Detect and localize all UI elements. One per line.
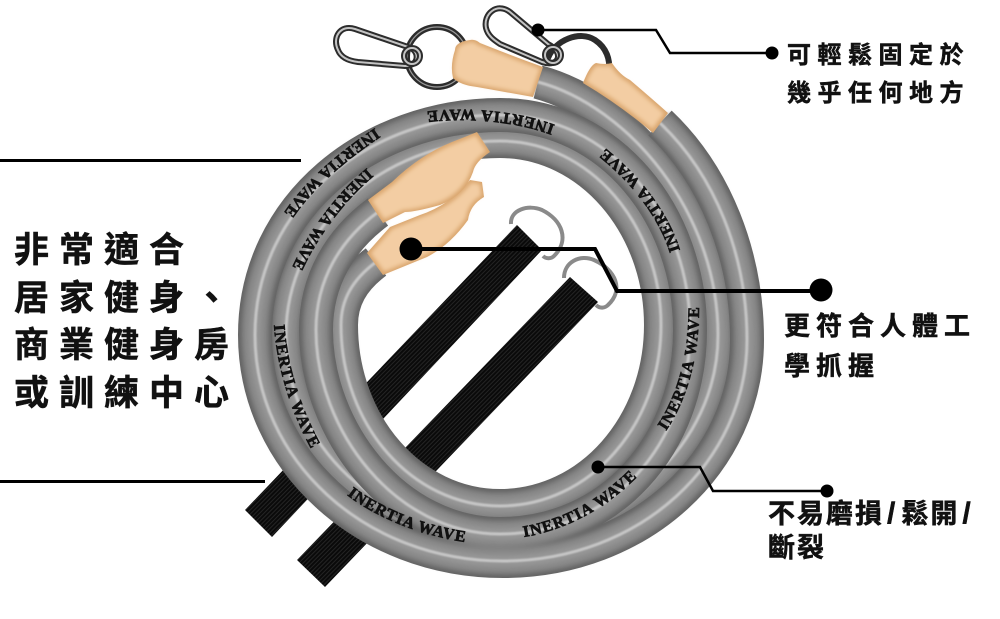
tube: outer spiral B: [255, 115, 747, 561]
arrow: leader to carabiner: [532, 24, 778, 60]
tube brand lettering: INERTIA WAVE: [522, 470, 637, 538]
heading: left text block: 或訓練中心: [14, 374, 239, 412]
heading: left text block: 居家健身、: [14, 278, 239, 318]
heading: left text block: 非常適合: [14, 231, 194, 270]
callout: durability: 不易磨損/鬆開/: [768, 497, 973, 530]
callout: anchoring: 幾乎任何地方: [787, 80, 970, 107]
tube brand lettering: INERTIA WAVE: [347, 486, 466, 542]
left divider top: [0, 159, 301, 162]
callout: ergonomic grip: 學抓握: [784, 351, 880, 381]
heading: left text block: [14, 231, 239, 412]
icon: steel ring left: [407, 27, 467, 87]
handle grip: upper inner sleeve: [368, 132, 490, 223]
tube brand lettering: INERTIA WAVE: [657, 308, 700, 431]
icon: carabiner right: [486, 8, 561, 63]
callout: ergonomic grip: 更符合人體工: [784, 311, 976, 341]
callout: durability: [768, 497, 973, 563]
handle grip: lower inner sleeve: [367, 180, 484, 275]
icon: D-ring left: [511, 208, 563, 258]
tube: inner spiral A: [286, 82, 718, 534]
handle grip: top-left peach sleeve: [452, 40, 543, 97]
icon: steel ring right: [548, 36, 609, 70]
tube brand lettering: INERTIA WAVE: [427, 109, 555, 136]
strap: right webbing: [297, 277, 598, 587]
tube brand lettering: INERTIA WAVE: [292, 168, 374, 271]
tube brand lettering: INERTIA WAVE: [284, 128, 381, 218]
handle grip: top-right peach sleeve: [583, 63, 668, 133]
callout: anchoring: 可輕鬆固定於: [787, 42, 970, 69]
callout: anchoring: [787, 42, 970, 107]
tube brand lettering: [274, 109, 700, 542]
strap: left webbing: [245, 225, 542, 537]
left divider bottom: [0, 480, 265, 483]
icon: carabiner left: [336, 28, 420, 66]
callout: ergonomic grip: [784, 311, 976, 381]
arrow: leader to tube: [592, 460, 834, 498]
tube brand lettering: INERTIA WAVE: [274, 324, 320, 448]
heading: left text block: 商業健身房: [14, 326, 239, 365]
tube brand lettering: INERTIA WAVE: [600, 148, 680, 254]
callout: durability: 斷裂: [768, 533, 826, 563]
icon: D-ring right: [564, 258, 616, 308]
arrow: leader to grip: [400, 238, 832, 302]
